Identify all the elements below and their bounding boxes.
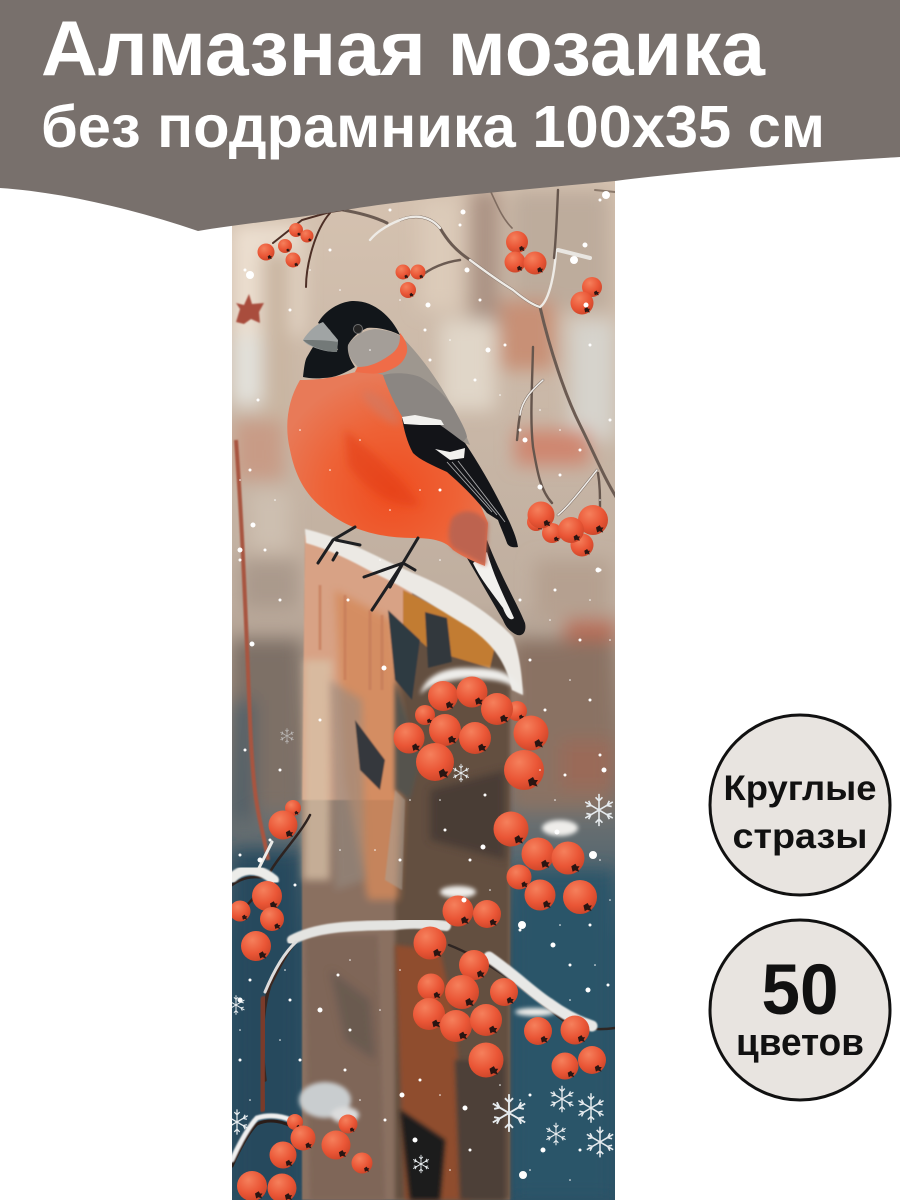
black wing (402, 418, 518, 547)
blurred forest background (232, 190, 615, 1200)
snow on post top (305, 529, 523, 695)
tree post (302, 535, 510, 1200)
badge: 50 colours (710, 920, 890, 1100)
cheek (348, 329, 400, 367)
title: Алмазная мозаика (41, 4, 766, 92)
lower branch (232, 815, 615, 1166)
body (287, 370, 488, 566)
falling snow (240, 195, 610, 1180)
gray back (375, 335, 470, 445)
badge: round rhinestones (710, 715, 890, 895)
eye (354, 324, 362, 334)
tail (467, 540, 525, 635)
rowan branches upper (273, 190, 618, 515)
rump (449, 511, 488, 566)
panel: painting of bullfinch (226, 170, 618, 1200)
subtitle: без подрамника 100х35 см (41, 94, 825, 160)
snow mounds (299, 668, 578, 1123)
black cap (303, 301, 400, 378)
beak (303, 322, 338, 352)
bullfinch (287, 301, 525, 635)
berries lower (230, 676, 606, 1200)
orange nape (355, 333, 407, 374)
badge: 50 colours: 50 (762, 951, 838, 1030)
gray wing (383, 373, 467, 442)
red leaf (236, 294, 264, 324)
badge: round rhinestones: стразы (732, 817, 868, 856)
legs (318, 527, 418, 610)
tall left twig (236, 440, 268, 860)
badge: 50 colours: цветов (736, 1022, 864, 1064)
snowflakes (226, 728, 613, 1173)
breast shading (344, 432, 414, 504)
badge: round rhinestones: Круглые (724, 769, 876, 808)
berries upper (258, 223, 608, 556)
header banner (0, 0, 900, 231)
